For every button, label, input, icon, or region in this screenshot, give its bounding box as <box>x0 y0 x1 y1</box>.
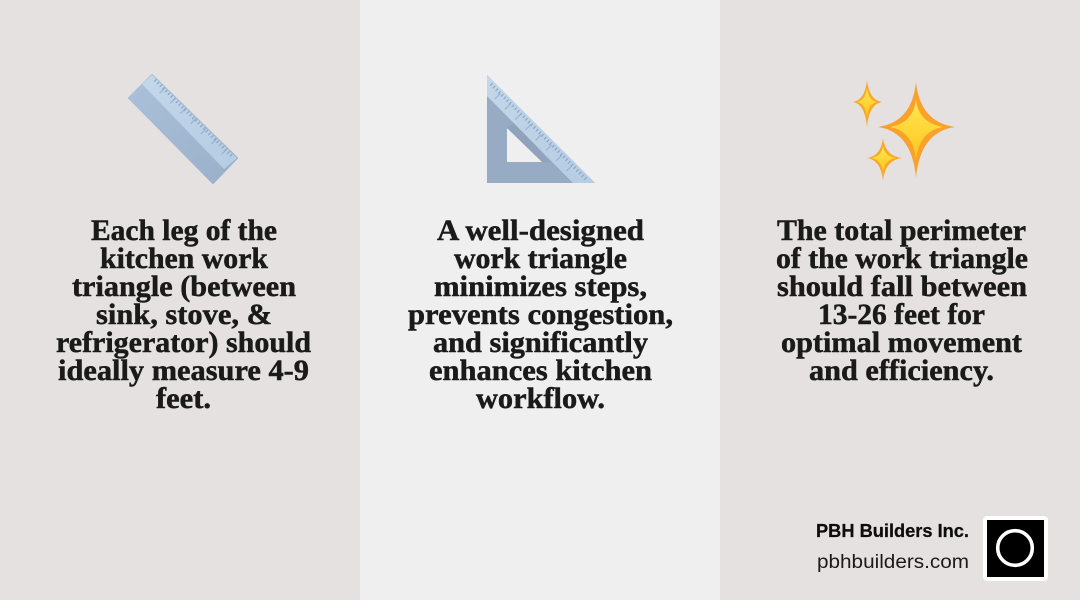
text: workflow benefits: prevents congestion, <box>408 298 673 331</box>
text: total perimeter: and efficiency. <box>809 354 994 387</box>
text: leg length: ideally measure 4-9 <box>58 354 309 387</box>
text: total perimeter: The total perimeter <box>777 214 1026 247</box>
footer: company name and website: PBH Builders Inc. <box>816 521 969 541</box>
text: workflow benefits: enhances kitchen <box>429 354 652 387</box>
text: total perimeter: of the work triangle <box>776 242 1028 275</box>
text: leg length: sink, stove, & <box>96 298 272 331</box>
text: workflow benefits: work triangle <box>454 242 627 275</box>
text: total perimeter: optimal movement <box>781 326 1022 359</box>
text: leg length: triangle (between <box>72 270 296 303</box>
icon: sparkles <box>853 80 955 181</box>
panel: total perimeter <box>720 0 1080 600</box>
icon: set square <box>487 75 595 183</box>
text: total perimeter: should fall between <box>777 270 1027 303</box>
icon: ruler <box>129 75 237 183</box>
text: workflow benefits: and significantly <box>433 326 648 359</box>
text: leg length: refrigerator) should <box>56 326 311 359</box>
panel: workflow benefits <box>360 0 720 600</box>
text: leg length <box>56 214 311 415</box>
text: workflow benefits: workflow. <box>476 382 605 415</box>
text: leg length: kitchen work <box>100 242 268 275</box>
logo <box>983 516 1048 581</box>
footer: company name and website <box>816 521 969 573</box>
panel: leg length <box>0 0 360 600</box>
text: workflow benefits <box>408 214 673 415</box>
text: leg length: feet. <box>156 382 211 415</box>
text: workflow benefits: minimizes steps, <box>434 270 647 303</box>
text: leg length: Each leg of the <box>91 214 277 247</box>
text: total perimeter <box>776 214 1028 387</box>
text: total perimeter: 13-26 feet for <box>818 298 985 331</box>
footer: company name and website: pbhbuilders.com <box>817 552 969 573</box>
text: workflow benefits: A well-designed <box>437 214 644 247</box>
